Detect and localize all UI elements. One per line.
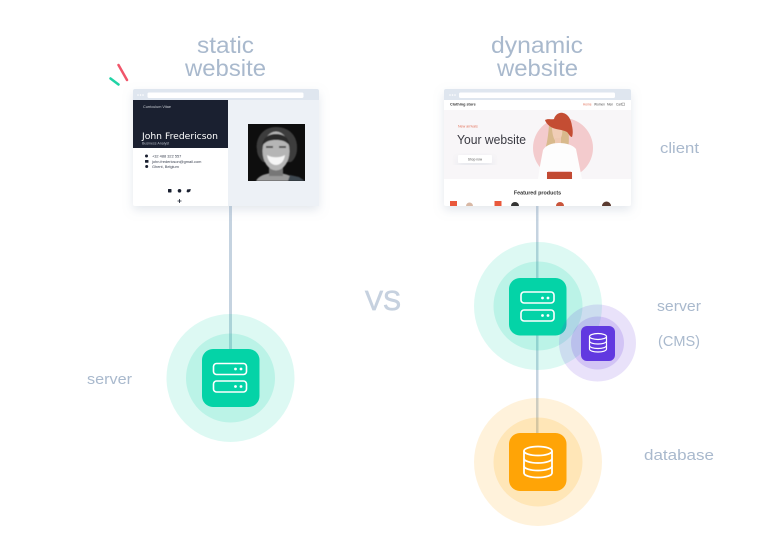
site nav: Cart: [616, 102, 622, 106]
site nav: Home: [583, 102, 592, 106]
dark profile header: John Fredericson: [141, 132, 218, 142]
browser mockup: static website: [133, 89, 319, 206]
site nav: [450, 102, 624, 106]
label: client: client: [660, 140, 700, 157]
browser bar: [133, 89, 319, 100]
hero banner: Shop now: [468, 158, 483, 162]
heading: dynamic website: website: [496, 55, 578, 81]
site nav: Clothing store: [450, 102, 476, 106]
icon: database: [474, 398, 602, 526]
dark profile header: [133, 100, 228, 148]
contact details: john.fredericson@gmail.com: [151, 159, 201, 164]
label: server (CMS): (CMS): [658, 333, 700, 350]
heading: static website: website: [184, 55, 266, 81]
label: server (static): server: [87, 371, 132, 388]
icon: dynamic server: [474, 242, 602, 370]
dark profile header: Business Analyst: [142, 142, 169, 146]
heading: dynamic website: [491, 32, 583, 81]
browser bar: [444, 89, 631, 100]
connector line: static: [229, 200, 232, 355]
label: server (CMS): server: [657, 298, 701, 315]
label: server (CMS): [657, 298, 701, 350]
icon: CMS database: [559, 304, 636, 382]
dark profile header: Curriculum Vitae: [143, 105, 171, 109]
connector line: dynamic: [536, 200, 538, 440]
contact details: Ghent, Belgium: [152, 164, 179, 169]
contact details: [145, 154, 201, 169]
portrait photo: [248, 124, 305, 181]
label: VS: VS: [365, 285, 401, 316]
social icons: [168, 189, 191, 203]
site nav: Women: [594, 102, 605, 106]
hero banner: [444, 110, 631, 179]
icon: static server: [166, 314, 294, 442]
decorative accent ticks: [110, 65, 127, 84]
contact details: +32 488 322 557: [152, 154, 181, 158]
hero banner: Your website: [457, 133, 526, 147]
hero banner: New arrivals: [458, 124, 478, 128]
featured products: [450, 190, 611, 206]
hero model illustration: [533, 113, 593, 179]
featured products: Featured products: [514, 190, 561, 196]
heading: static website: static: [197, 32, 254, 58]
site nav: Men: [607, 102, 613, 106]
browser mockup: dynamic website: [444, 89, 631, 206]
heading: static website: [184, 32, 266, 81]
heading: dynamic website: dynamic: [491, 32, 583, 58]
label: database: database: [644, 447, 714, 464]
